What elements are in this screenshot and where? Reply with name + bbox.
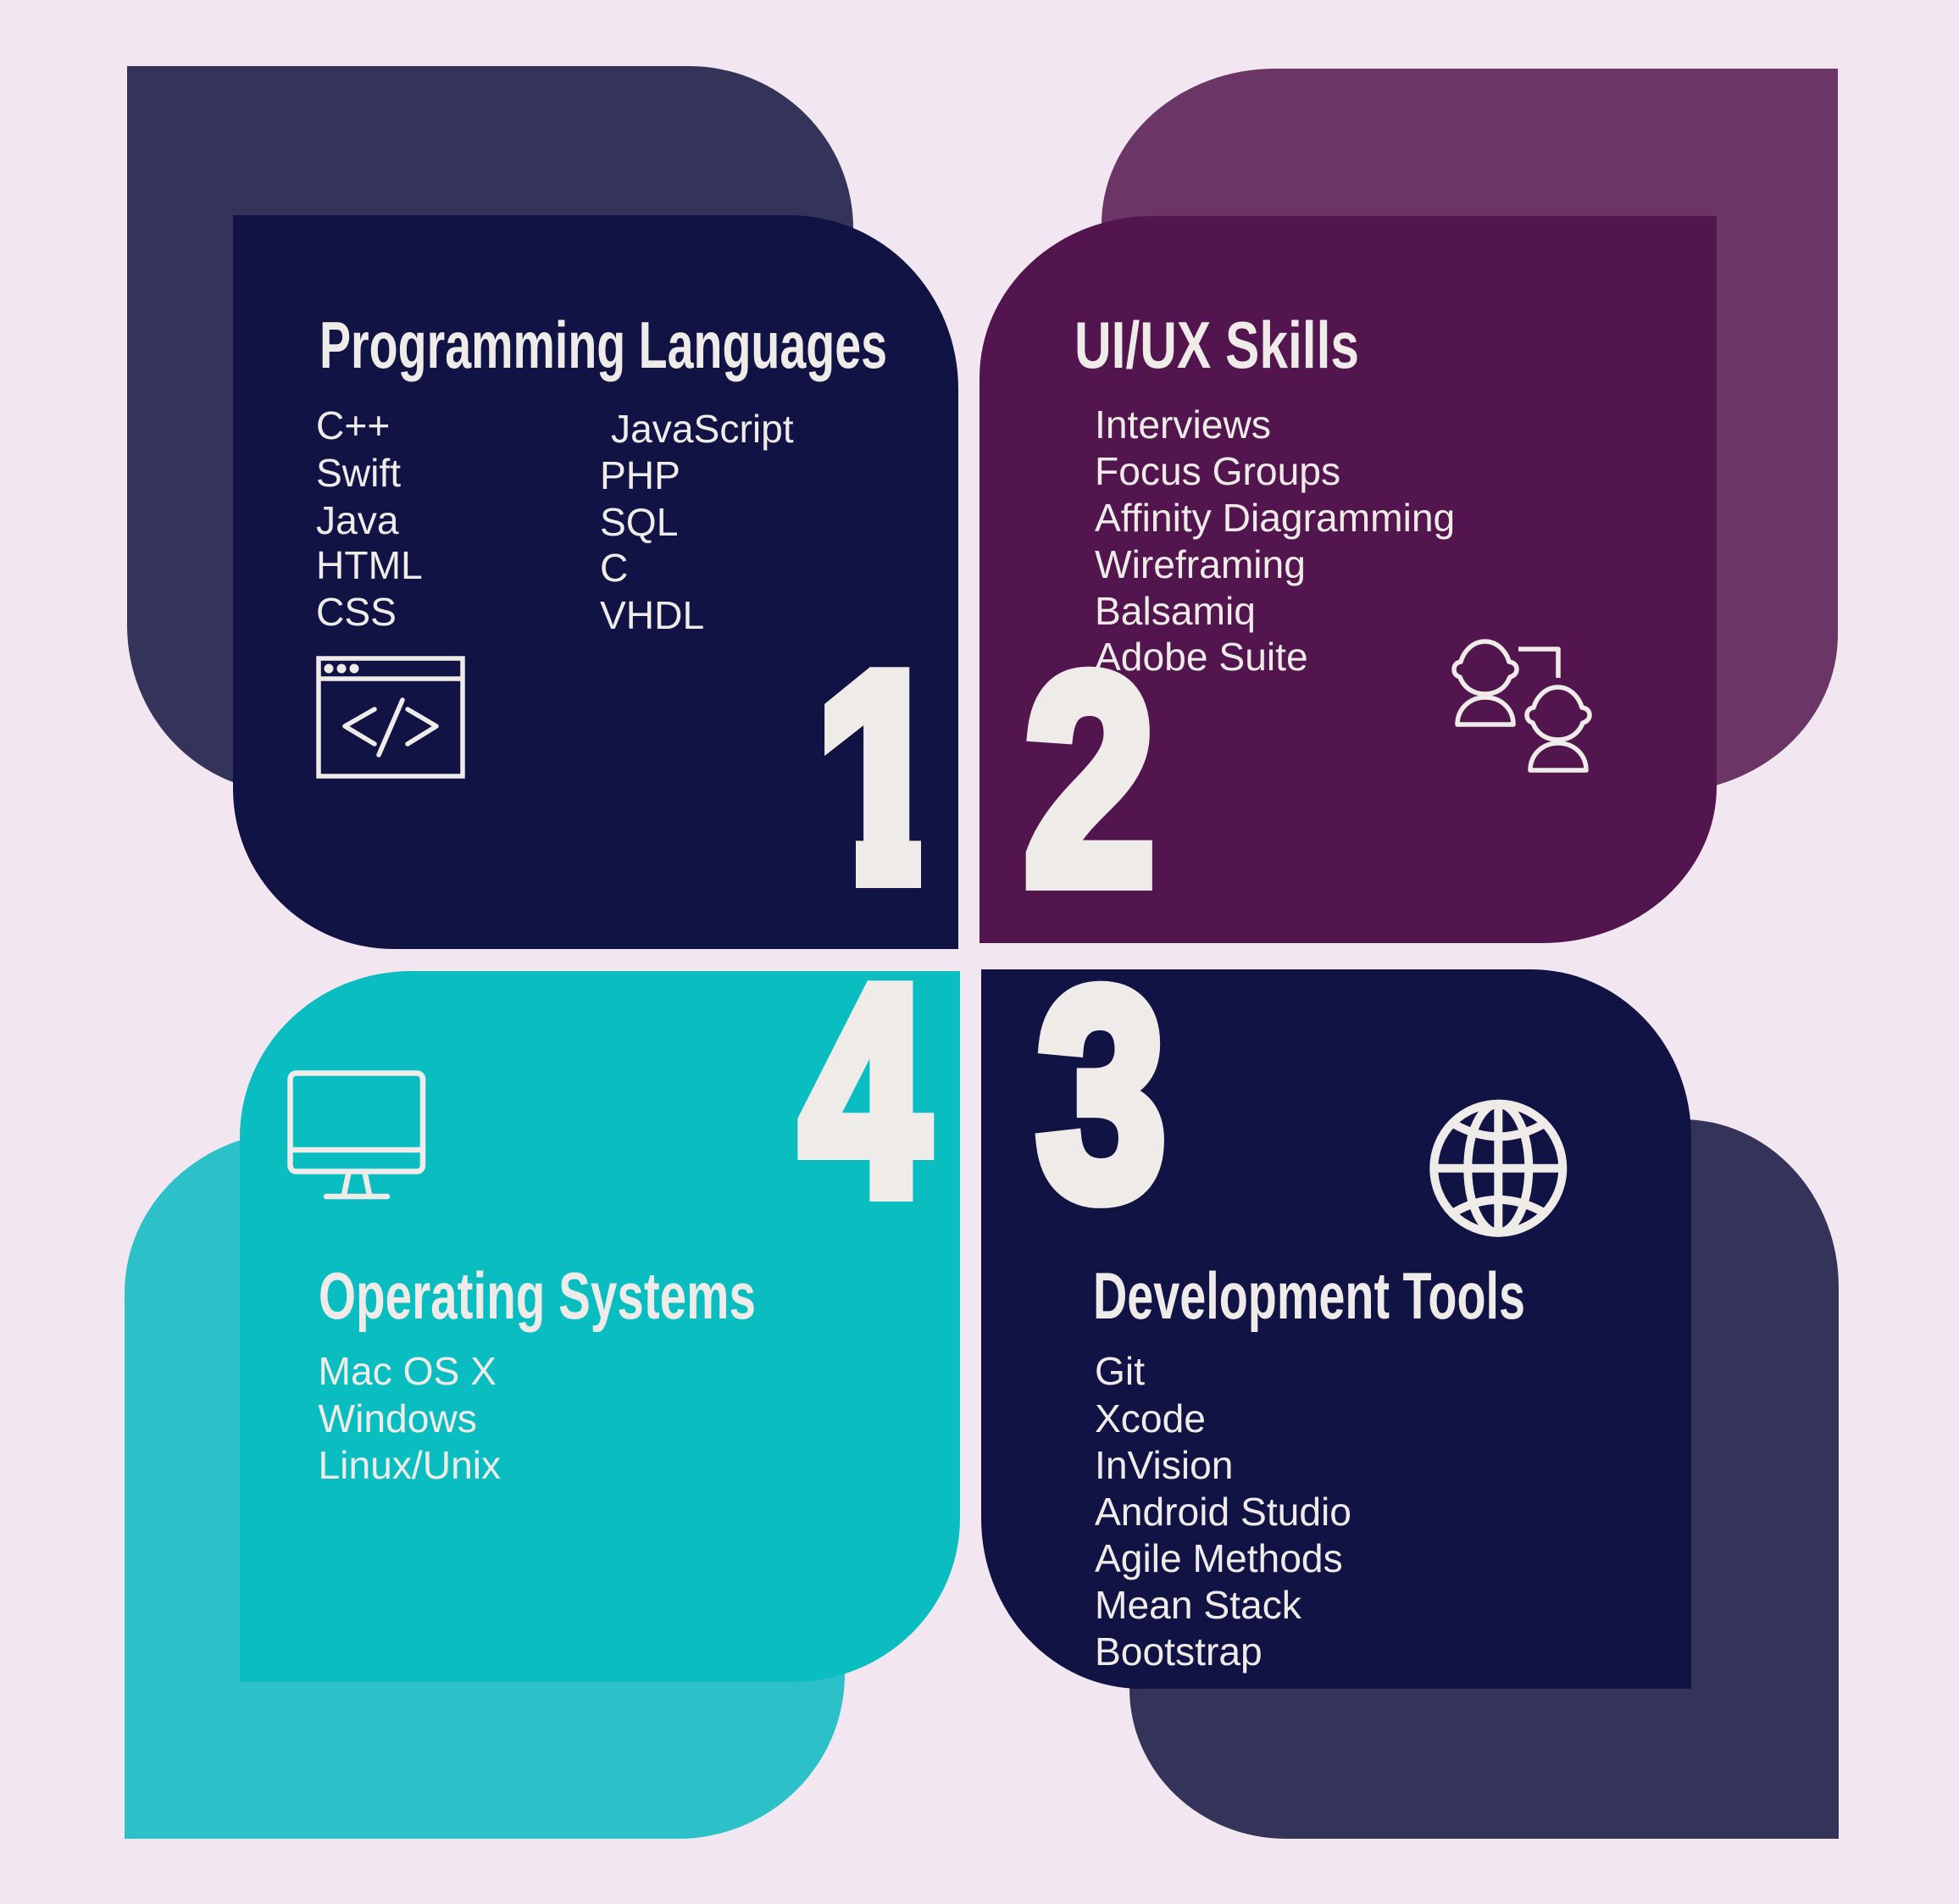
list: development tools: Xcode xyxy=(1095,1396,1206,1440)
list: languages column two: VHDL xyxy=(600,593,704,637)
list: languages column two: C xyxy=(600,546,628,590)
list: languages column two xyxy=(600,407,794,637)
panel 2 front shape xyxy=(980,216,1717,943)
panel 1 back shape xyxy=(127,66,853,792)
panel 3 back shape xyxy=(1129,1119,1839,1839)
panel 1: programming languages xyxy=(127,66,958,949)
list: development tools xyxy=(1095,1349,1351,1674)
list: ui/ux skills: Interviews xyxy=(1095,402,1271,447)
list: development tools: Bootstrap xyxy=(1095,1629,1263,1674)
heading: operating systems: Operating Systems xyxy=(319,1258,756,1333)
icon: globe xyxy=(1434,1104,1562,1233)
panel 4 front shape xyxy=(240,971,960,1682)
list: ui/ux skills: Wireframing xyxy=(1095,542,1306,586)
list: operating systems xyxy=(319,1349,501,1487)
panel 3: development tools xyxy=(981,929,1839,1839)
list: operating systems: Linux/Unix xyxy=(319,1443,501,1487)
list: languages column one: Swift xyxy=(316,451,401,495)
panel 3 front shape xyxy=(981,969,1691,1689)
list: operating systems: Mac OS X xyxy=(319,1349,497,1393)
list: languages column two: SQL xyxy=(600,500,678,544)
list: development tools: Git xyxy=(1095,1349,1145,1393)
panel 4: operating systems xyxy=(125,925,960,1839)
list: ui/ux skills: Affinity Diagramming xyxy=(1095,496,1455,540)
panel 2: ui/ux skills xyxy=(980,69,1838,946)
list: languages column two: PHP xyxy=(600,453,680,497)
numeral 1: 1 xyxy=(815,612,946,943)
icon: code window xyxy=(319,658,463,776)
panel 2 back shape xyxy=(1102,69,1838,792)
numeral 2: 2 xyxy=(1024,614,1155,946)
list: languages column one: CSS xyxy=(316,590,397,634)
list: languages column two: JavaScript xyxy=(611,407,794,451)
panel 4 back shape xyxy=(125,1131,845,1839)
list: development tools: Agile Methods xyxy=(1095,1536,1343,1580)
heading: programming languages: Programming Languages xyxy=(319,308,887,382)
heading: ui/ux skills: UI/UX Skills xyxy=(1074,308,1359,382)
list: ui/ux skills: Focus Groups xyxy=(1095,449,1340,493)
list: development tools: Android Studio xyxy=(1095,1490,1351,1534)
list: languages column one: C++ xyxy=(316,403,390,447)
list: development tools: InVision xyxy=(1095,1443,1233,1487)
numeral 4: 4 xyxy=(801,925,930,1257)
list: ui/ux skills xyxy=(1095,402,1455,679)
list: languages column one: Java xyxy=(316,498,399,542)
list: languages column one: HTML xyxy=(316,543,423,587)
icon: two users xyxy=(1454,641,1590,770)
list: ui/ux skills: Adobe Suite xyxy=(1095,635,1308,679)
heading: development tools: Development Tools xyxy=(1093,1258,1525,1333)
numeral 3: 3 xyxy=(1037,929,1166,1260)
panel 1 front shape xyxy=(233,215,958,949)
list: development tools: Mean Stack xyxy=(1095,1583,1302,1627)
list: ui/ux skills: Balsamiq xyxy=(1095,589,1256,633)
list: operating systems: Windows xyxy=(319,1396,477,1440)
list: languages column one xyxy=(316,403,423,634)
icon: desktop monitor xyxy=(290,1073,423,1196)
